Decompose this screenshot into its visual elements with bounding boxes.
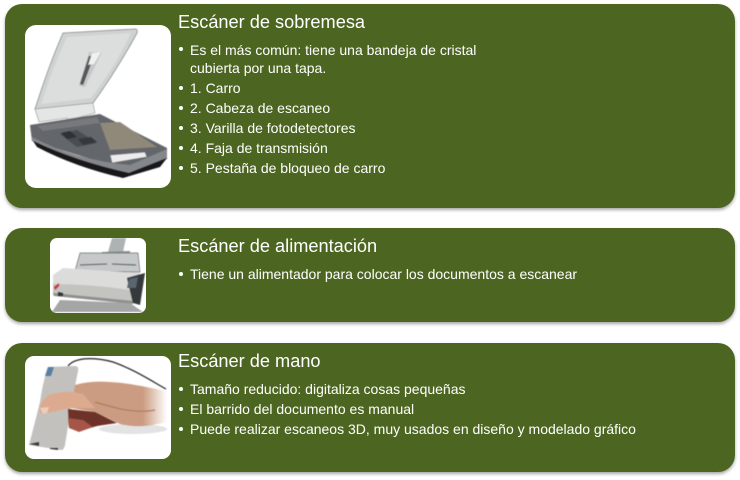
text: bullet 1: cubierta por una tapa. xyxy=(190,60,326,76)
icon: flatbed scanner photo xyxy=(25,25,171,188)
text: bullet 1 xyxy=(190,41,476,77)
text: mano bullet 2: El barrido del documento es manual xyxy=(190,401,414,417)
text: bullet 1: Es el más común: tiene una bandeja de cristal xyxy=(190,42,476,58)
icon: handheld scanner photo xyxy=(25,356,171,459)
text: bullet 5: 4. Faja de transmisión xyxy=(190,140,328,156)
text: bullet 4: 3. Varilla de fotodetectores xyxy=(190,120,356,136)
heading: escáner de sobremesa: Escáner de sobremesa xyxy=(178,12,365,32)
text: bullet 6: 5. Pestaña de bloqueo de carro xyxy=(190,160,385,176)
heading: escáner de mano: Escáner de mano xyxy=(178,351,321,371)
icon: sheet-fed scanner photo xyxy=(50,238,146,313)
text: mano bullet 1: Tamaño reducido: digitaliza cosas pequeñas xyxy=(190,381,466,397)
text: mano bullet 3: Puede realizar escaneos 3D, muy usados en diseño y modelado gráfico xyxy=(190,421,636,437)
panel: escáner de sobremesa xyxy=(5,4,735,208)
panel: escáner de mano xyxy=(5,343,735,472)
text: bullet 3: 2. Cabeza de escaneo xyxy=(190,100,330,116)
text: alimentación bullet: Tiene un alimentador para colocar los documentos a escanear xyxy=(190,266,577,282)
heading: escáner de alimentación: Escáner de alimentación xyxy=(178,236,377,256)
panel: escáner de alimentación xyxy=(5,228,735,322)
text: bullet 2: 1. Carro xyxy=(190,80,241,96)
